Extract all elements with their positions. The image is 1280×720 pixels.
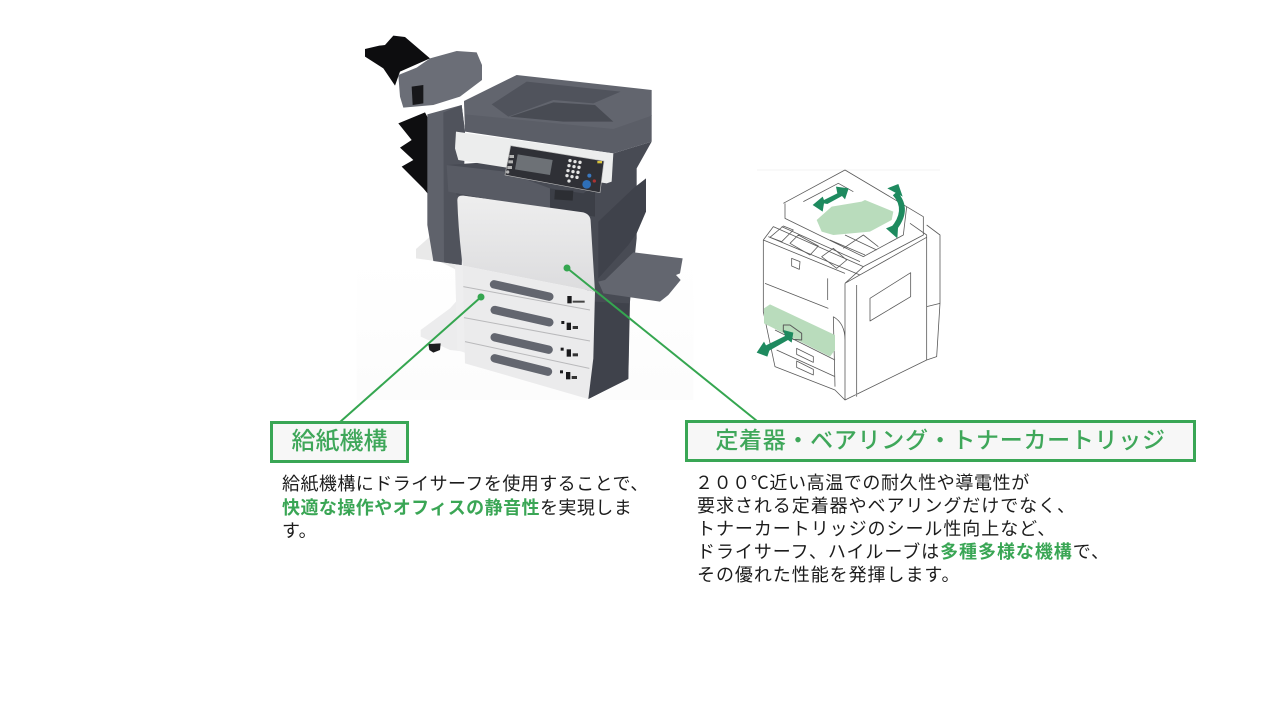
text block: paper feed xyxy=(282,474,649,541)
feature diagram xyxy=(757,170,940,400)
dot: paper feed xyxy=(478,294,484,300)
keypad xyxy=(565,159,582,183)
text block: paper feed: す。 xyxy=(282,521,317,541)
text block: fuser: ドライサーフ、ハイルーブは多種多様な機構で、 xyxy=(697,542,1110,562)
top paper path highlight xyxy=(817,200,893,235)
drawer labels xyxy=(560,296,585,379)
heading: fuser, bearing, toner cartridge: 定着器・ベアリング・トナーカートリッジ xyxy=(715,427,1166,453)
arrow: top horizontal xyxy=(813,187,849,212)
leader line: fuser xyxy=(567,268,757,421)
vent xyxy=(554,190,573,201)
scanner lower body xyxy=(464,101,652,153)
leader line: paper feed xyxy=(340,297,481,422)
text block: fuser xyxy=(695,473,1110,585)
arrow: lower diagonal xyxy=(757,330,793,357)
right side panel xyxy=(598,178,646,278)
finisher head xyxy=(398,51,482,108)
text block: fuser: 要求される定着器やベアリングだけでなく、 xyxy=(697,496,1076,516)
drawer handles xyxy=(494,284,549,372)
document feeder lid xyxy=(464,75,652,129)
side tower xyxy=(427,105,465,265)
heading: paper feed mechanism xyxy=(270,421,409,463)
white front door xyxy=(457,196,595,292)
text block: paper feed: 給紙機構にドライサーフを使用することで、 xyxy=(282,474,649,494)
feeder outline xyxy=(785,183,907,257)
arrow heads: curved xyxy=(886,184,903,238)
caster xyxy=(428,343,441,353)
machine body outline xyxy=(763,170,940,400)
top output tray xyxy=(365,36,430,86)
start buttons xyxy=(582,180,591,189)
white scanner panel xyxy=(455,132,613,183)
dot: fuser xyxy=(564,264,570,272)
bypass tray xyxy=(598,252,683,302)
faint top rule of diagram xyxy=(757,169,940,171)
printer photo xyxy=(357,36,693,400)
lower right cabinet xyxy=(588,302,629,399)
main dark body xyxy=(447,142,652,399)
control details xyxy=(770,226,847,269)
text block: fuser: その優れた性能を発揮します。 xyxy=(697,565,960,585)
text block: paper feed: 快適な操作やオフィスの静音性を実現しま xyxy=(282,498,632,518)
cassette handles xyxy=(797,348,813,375)
screen xyxy=(515,154,553,175)
white base wing xyxy=(416,237,460,272)
heading: fuser, bearing, toner cartridge xyxy=(685,420,1196,462)
feeder tray xyxy=(492,82,621,117)
heading: paper feed mechanism: 給紙機構 xyxy=(292,428,388,455)
side window xyxy=(870,273,911,321)
shelf under scanner xyxy=(447,165,550,210)
stacked output trays xyxy=(398,112,432,198)
paper drawers xyxy=(463,266,595,399)
text block: fuser: トナーカートリッジのシール性向上など、 xyxy=(697,519,1056,539)
floor shadow xyxy=(357,258,693,400)
control panel xyxy=(505,146,604,193)
lower paper path highlight xyxy=(764,304,835,357)
arrow: curved xyxy=(893,193,902,230)
text block: fuser: ２００℃近い高温での耐久性や導電性が xyxy=(695,473,1030,493)
